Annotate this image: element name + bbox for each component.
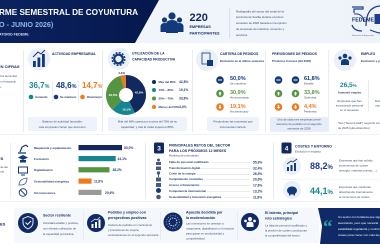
legend: 33,8% — [179, 96, 188, 100]
row: optimista: 33,8% — [304, 90, 320, 96]
legend: Más del 85% — [158, 80, 176, 84]
icon: team — [241, 213, 259, 231]
stat: aumentó empleo: Empresas que han — [337, 99, 362, 103]
intro paragraph — [236, 10, 287, 37]
ranking list: Competencia internacional — [169, 189, 206, 193]
heading: PRINCIPALES RETOS DEL SECTOR — [169, 144, 231, 148]
callout: Uno de cada tres empresas prevé — [277, 118, 321, 122]
icon: people — [334, 49, 356, 71]
report title: RME SEMESTRAL DE COYUNTURA — [0, 8, 138, 17]
callout — [270, 117, 328, 132]
bar chart: 20,6% — [105, 191, 114, 195]
stat: aumenta — [29, 81, 50, 99]
row: se mantiene: Se mantiene — [230, 82, 247, 86]
header banner — [0, 0, 159, 43]
badge 3: 3 — [157, 146, 161, 152]
stat: aumentó empleo — [336, 82, 363, 112]
card: talento — [241, 211, 308, 238]
quote text: avanzando, pero que necesita — [338, 221, 379, 225]
ranking icons — [156, 158, 161, 199]
stat: se mantiene: Se mantuvo — [60, 95, 77, 99]
card: sector resiliente: Sector resiliente — [43, 214, 71, 218]
bar chart: 11,8% — [94, 180, 103, 184]
footnote — [338, 121, 380, 130]
icon: graduation cap — [18, 155, 28, 162]
legend: 19,1% — [179, 88, 188, 92]
icon: leaf — [19, 178, 27, 185]
ranking list — [169, 160, 262, 200]
panel text — [0, 165, 8, 174]
card: talento: El talento, principal — [265, 211, 298, 215]
stat: 88,2% — [310, 158, 377, 172]
icon: piggy bank — [283, 181, 301, 199]
participants count: 220 — [190, 12, 208, 24]
heading — [295, 144, 332, 154]
intro paragraph: semestre de 2026 basada en la opinión — [236, 21, 287, 25]
en cifras text — [0, 74, 18, 89]
donut chart — [109, 71, 144, 112]
callout — [108, 117, 187, 131]
row: optimista — [275, 90, 320, 100]
icon: network — [164, 212, 182, 232]
stat: se mantiene: 48,6% — [56, 81, 77, 90]
participants count: EMPRESAS — [190, 25, 211, 29]
icon: participants — [160, 12, 184, 33]
row: estable — [275, 76, 320, 86]
callout — [28, 117, 97, 131]
row: ha aumentado: Ha aumentado — [230, 96, 249, 100]
heading: ACTIVIDAD EMPRESARIAL — [52, 52, 96, 56]
participants count: PARTICIPANTES — [190, 32, 220, 36]
card: modernización: la modernización — [186, 216, 215, 220]
heading — [169, 144, 231, 158]
stat: disminuye — [80, 81, 103, 99]
icon: shield — [18, 213, 38, 233]
card: modernización: Apuesta decidida por — [186, 210, 223, 214]
stat: 88,2%: incrementos de costes — [339, 164, 368, 168]
heading: CARTERA DE PEDIDOS — [220, 52, 259, 56]
stat: disminuye: 14,7% — [82, 81, 103, 90]
ranking list: Coste de la energía — [169, 172, 196, 176]
icon: robot arm — [18, 145, 28, 153]
stat: aumentó empleo: 26,5% — [340, 82, 357, 89]
heading: CAPACIDAD PRODUCTIVA — [132, 58, 176, 62]
panel: conclusions — [14, 208, 319, 243]
stat: aumenta: Aumentó — [35, 95, 48, 99]
intro paragraph: servicios. — [236, 33, 248, 37]
header background — [0, 0, 380, 43]
row: ha disminuido: 19,1% — [230, 104, 246, 110]
row: se mantiene: 50,0% — [230, 76, 246, 82]
row: ha disminuido — [216, 103, 249, 114]
card: modernización: Las inversiones se orientan a — [186, 222, 224, 226]
heading: EMPLEO — [361, 52, 376, 56]
row: ha aumentado — [216, 90, 249, 100]
row: ha disminuido: Ha disminuido — [230, 110, 249, 114]
card: pedidos y empleo: contrataciones en el segundo semestre. — [108, 233, 159, 237]
row: estable: Estable — [304, 82, 314, 86]
card: pedidos y empleo: Cartera de pedidos en crecimiento — [108, 223, 153, 227]
stat: aumenta: 36,7% — [29, 81, 50, 90]
donut chart: 19,1% — [122, 108, 131, 112]
intro paragraph: de empresas de industria, comercio y — [236, 27, 285, 31]
stat: 44,1%: absorbiendo internamente — [339, 190, 373, 194]
bar chart: Digitalización — [34, 168, 53, 172]
callout: Predominan las empresas que — [213, 120, 253, 124]
callout — [207, 117, 259, 131]
ranking list: 20,6% — [253, 178, 262, 182]
ranking list: 17,6% — [253, 184, 262, 188]
donut chart: 4,4% — [118, 71, 125, 75]
quote box — [318, 208, 380, 244]
card: talento: la competitividad del sector. — [265, 234, 301, 238]
heading: PARA LOS PRÓXIMOS 12 MESES — [169, 148, 227, 153]
footnote: de 2026 (julio-diciembre) — [338, 126, 370, 130]
card: sector resiliente: con elevado utilización de — [43, 226, 76, 230]
ranking list: Sostenibilidad y transición energética — [169, 195, 221, 199]
callout: aumento de pedidos en el segundo — [276, 122, 322, 126]
card: talento: reto estratégico — [265, 216, 293, 220]
ranking list: Falta de personal cualificado — [169, 160, 209, 164]
callout: Más del 60% opera por encima del 70% de su — [118, 120, 177, 124]
ranking list: 32,4% — [253, 166, 262, 170]
icon: rising costs — [283, 157, 301, 175]
stat: previsión (cropped) — [375, 99, 380, 108]
panel: previsiones de pedidos — [270, 52, 328, 132]
logo: FEDEME 50: Federación de Empresarios — [352, 35, 374, 37]
icon: quote mark: “ — [323, 217, 332, 238]
icon: clipboard — [196, 49, 218, 71]
icon: monitor — [18, 167, 28, 175]
badge 4: 4 — [285, 146, 289, 152]
heading: UTILIZACIÓN DE LA — [132, 50, 165, 56]
bar chart: 38,2% — [112, 168, 122, 172]
stat: 44,1%: Empresas que continúan — [339, 185, 371, 189]
row: optimista: Optimista — [304, 96, 317, 100]
participants count — [190, 12, 220, 36]
bar chart — [34, 145, 133, 195]
callout: semestre de 2026 — [287, 126, 311, 130]
intro paragraph: provincia de Sevilla durante el primer — [236, 15, 284, 19]
icon: no symbol — [19, 189, 27, 196]
ranking list: 11,8% — [253, 196, 262, 200]
bar chart: Formación — [34, 157, 49, 161]
card: sector resiliente: la capacidad productiva. — [43, 232, 74, 236]
donut chart: 42,8% — [135, 90, 144, 94]
stat: 88,2%: (energía, materias primas, …) — [339, 168, 377, 172]
bar chart: Sostenibilidad energética — [34, 180, 69, 184]
stat: aumentó empleo: en el semestre — [340, 108, 359, 112]
row: pesimista: 4,4% — [304, 104, 317, 110]
card: sector resiliente — [18, 213, 79, 236]
stat: 44,1%: el incremento de costes — [339, 195, 370, 199]
subheading: Evolución en el último semestre — [220, 59, 265, 63]
callout: más empresas crecen que decrecen. — [39, 125, 86, 129]
callout: Balance de actividad favorable: — [42, 120, 83, 124]
stat: aumentó empleo: incorporado personal — [336, 104, 363, 108]
subheading: Próximos 6 meses (H2 2026) — [272, 59, 311, 63]
legend: 4,4% — [179, 105, 187, 109]
donut chart: 33,8% — [109, 93, 118, 97]
heading — [132, 50, 176, 62]
card: talento: la presión de costes condicionan — [265, 228, 307, 232]
stat: 88,2%: 88,2% — [310, 161, 334, 171]
legend: 42,8% — [179, 80, 188, 84]
row: se mantiene — [216, 76, 247, 86]
legend: 50% – 70% — [158, 96, 174, 100]
icon: gear — [108, 48, 130, 70]
icon: growth chart — [28, 48, 50, 70]
logo: FEDEME 50: FEDEME — [352, 18, 375, 24]
card: pedidos y empleo: perspectivas positivas — [108, 216, 147, 220]
ranking list: Acceso a financiación — [169, 183, 200, 187]
row: estable: 61,8% — [304, 76, 320, 82]
card: modernización: competitividad. — [186, 236, 205, 240]
heading: Ranking de prioridades — [169, 154, 199, 158]
stat: disminuye: Disminuyó — [87, 95, 102, 99]
icon: growth — [87, 214, 105, 232]
card: modernización: maquinaria, digitalización y formación — [186, 226, 235, 230]
panel: principales retos — [154, 142, 262, 200]
card: pedidos y empleo: y previsiones de mejora, — [108, 228, 140, 232]
ranking list: 26,5% — [253, 172, 262, 176]
heading: COSTES Y ENTORNO — [295, 144, 332, 148]
card: modernización: para ganar en productividad y — [186, 232, 225, 236]
report period: O - JUNIO 2026) — [0, 20, 54, 29]
card: talento: La falta de personal cualificado y — [265, 224, 308, 228]
bar chart: Maquinaria y equipamiento — [34, 146, 71, 150]
callout: incrementan cartera. — [220, 125, 246, 129]
stat: 88,2%: Empresas que han sufrido — [339, 158, 373, 162]
stat: aumentó empleo: Aumentó empleo — [338, 90, 361, 94]
card: sector resiliente: Actividad estable y positiva, — [43, 221, 79, 225]
stat: 44,1% — [310, 185, 373, 199]
panel: costes y entorno — [282, 142, 380, 199]
bar chart: Sin inversiones — [34, 191, 56, 195]
panel: cartera de pedidos — [196, 49, 265, 131]
legend: 70% – 85% — [158, 88, 174, 92]
ranking list: 55,9% — [253, 160, 262, 164]
panel: inversiones — [0, 143, 133, 199]
row: ha aumentado: 30,9% — [230, 90, 246, 96]
bar chart: 44,1% — [118, 157, 127, 161]
panel: actividad empresarial — [28, 48, 103, 131]
card: pedidos y empleo — [87, 210, 159, 237]
stat: 44,1%: 44,1% — [310, 186, 334, 196]
panel: en cifras — [0, 64, 20, 89]
callout: capacidad, y casi la mitad supera el 85%. — [121, 125, 174, 129]
card: pedidos y empleo: Pedidos y empleo con — [108, 210, 146, 214]
panel: utilización de la capacidad productiva — [108, 48, 188, 131]
heading: PREVISIONES DE PEDIDOS — [272, 52, 318, 56]
ranking list: 13,2% — [253, 190, 262, 194]
heading: Evolución e impacto — [295, 150, 321, 154]
bar chart: 50,0% — [124, 146, 133, 150]
stat: se mantiene — [54, 81, 77, 99]
intro paragraph: Radiografía del sector del metal de la — [236, 10, 284, 14]
row: pesimista: Pesimista — [304, 110, 317, 114]
row: pesimista — [275, 103, 317, 114]
legend — [152, 80, 188, 109]
ranking list: Transformación digital — [169, 166, 200, 170]
ranking list: Cumplimiento normativo — [169, 177, 203, 181]
quote text — [338, 215, 380, 237]
panel: empleo — [334, 49, 380, 130]
logo: FEDEME 50 — [352, 6, 380, 37]
legend: Menos del 50% — [158, 105, 180, 109]
card: modernización — [164, 210, 235, 240]
